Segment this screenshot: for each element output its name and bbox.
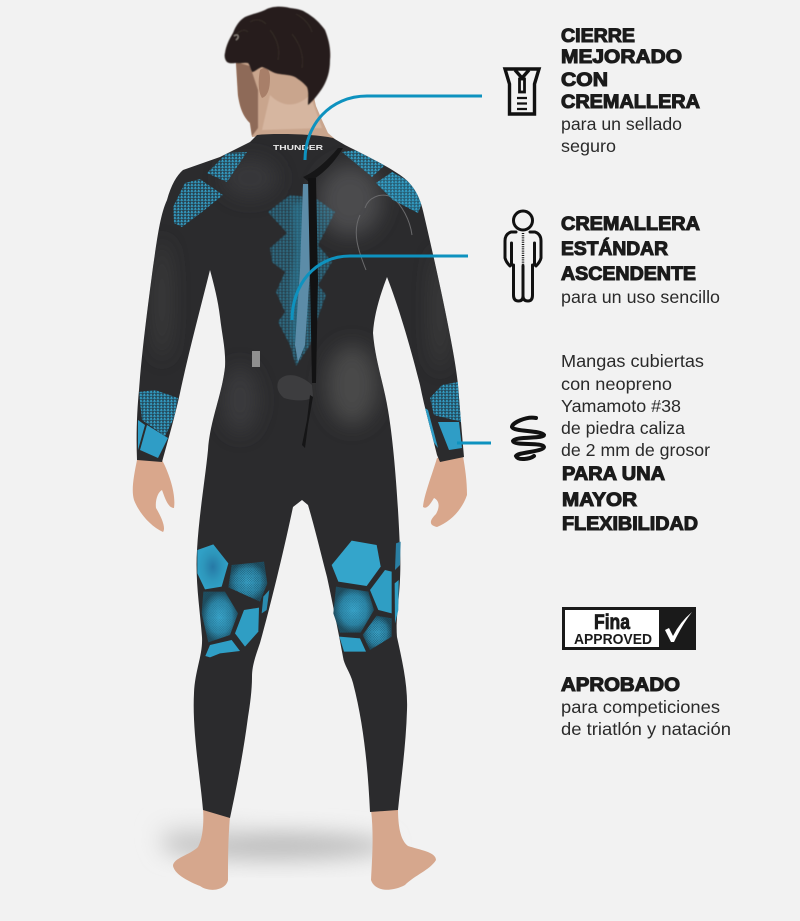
description: Yamamoto #38 (561, 396, 681, 416)
description: de 2 mm de grosor (561, 440, 710, 460)
text block: sleeves (561, 351, 710, 535)
heading: ESTÁNDAR (561, 237, 668, 260)
wetsuit body (137, 134, 464, 818)
heading: CREMALLERA (561, 91, 700, 113)
feet (173, 808, 436, 890)
hexagon (262, 590, 269, 613)
left knee hexagons (197, 544, 269, 657)
text block: zipper (561, 213, 720, 307)
hexagon (339, 637, 366, 652)
icon: ear (259, 68, 270, 98)
hair (225, 7, 330, 105)
pattern: left shoulder dots (173, 152, 247, 227)
pattern: spine dots (268, 195, 335, 366)
wetsuit shading (138, 150, 462, 458)
hexagon (202, 592, 238, 642)
heading: CIERRE (561, 25, 635, 47)
heading: APROBADO (561, 674, 680, 696)
description: para un sellado (561, 114, 682, 134)
badge: Fina approved: Fina (594, 611, 630, 634)
heading: PARA UNA (562, 463, 665, 485)
text block: closure (561, 25, 700, 156)
leader line: closure (305, 96, 482, 160)
heading (561, 213, 700, 285)
description: para un uso sencillo (561, 287, 720, 307)
hexagon (395, 580, 399, 623)
heading: MEJORADO (561, 46, 682, 68)
hexagon (332, 541, 381, 586)
description: de piedra caliza (561, 418, 685, 438)
icon: person with back zipper (505, 211, 541, 301)
size label (252, 351, 260, 367)
description: para competiciones (561, 697, 720, 717)
heading (561, 25, 700, 113)
badge: Fina approved (562, 607, 696, 650)
description: Mangas cubiertas (561, 351, 704, 371)
leader line: sleeve (457, 442, 491, 444)
brand label: THUNDER: THUNDER (273, 143, 324, 152)
description (561, 114, 682, 156)
heading: FLEXIBILIDAD (562, 513, 698, 535)
leader line: zipper (292, 256, 468, 320)
hexagon (363, 616, 392, 650)
heading: CREMALLERA (561, 213, 700, 235)
description: con neopreno (561, 374, 672, 394)
icon: spring (512, 418, 544, 459)
hexagon (205, 640, 240, 657)
description (561, 697, 731, 739)
description (561, 351, 710, 460)
neck and head skin (236, 60, 335, 139)
zipper flap (277, 148, 343, 448)
right knee hexagons (332, 541, 401, 652)
hexagon (395, 542, 401, 570)
heading: ASCENDENTE (561, 263, 696, 285)
badge: Fina approved: APPROVED (574, 631, 652, 648)
heading (562, 463, 698, 535)
pattern: right wrist (425, 382, 462, 450)
hexagon (197, 544, 228, 589)
description: de triatlón y natación (561, 719, 731, 739)
pattern: right shoulder dots (342, 150, 423, 213)
heading: CON (561, 69, 608, 91)
text block: approved (561, 674, 731, 739)
hexagon (370, 570, 392, 613)
hands (133, 456, 467, 532)
hexagon (228, 562, 267, 602)
floor shadow (155, 825, 390, 860)
heading: MAYOR (562, 489, 637, 511)
icon: check mark (665, 612, 692, 642)
icon: zipper collar (505, 69, 539, 114)
hexagon (235, 608, 259, 647)
wetsuit model figure (133, 7, 467, 890)
description: seguro (561, 136, 616, 156)
hexagon (333, 587, 374, 633)
pattern: left wrist (138, 390, 178, 458)
